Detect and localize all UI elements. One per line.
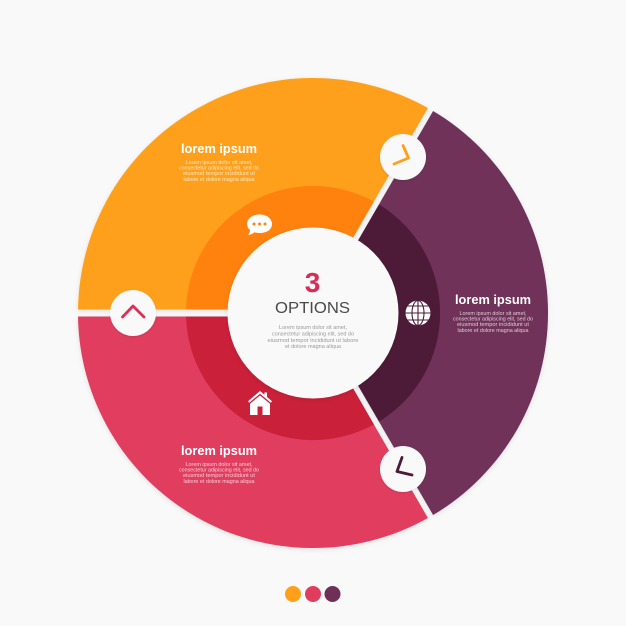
purple heading: lorem ipsum — [455, 292, 531, 307]
red body text: Lorem ipsum dolor sit amet, — [186, 462, 253, 468]
orange body text: consectetur adipiscing elit, sed do — [179, 166, 259, 172]
center body text — [268, 325, 358, 350]
red body text: eiusmod tempor incididunt ut — [183, 473, 256, 479]
panel: red segment — [78, 314, 428, 548]
red inner band — [186, 314, 374, 440]
icon: chat bubble — [247, 214, 272, 235]
purple body text: consectetur adipiscing elit, sed do — [453, 317, 533, 323]
red heading: lorem ipsum — [181, 443, 257, 458]
center circle — [228, 228, 398, 398]
center body text: Lorem ipsum dolor sit amet, — [279, 325, 347, 331]
purple outer band — [316, 111, 548, 515]
button: left chevron — [110, 290, 156, 336]
button: bottom-right chevron — [380, 446, 426, 492]
button: top-right chevron — [380, 134, 426, 180]
red body text — [179, 462, 259, 485]
orange outer band — [78, 78, 428, 312]
red body text: labore et dolore magna aliqua — [184, 479, 254, 485]
orange heading: lorem ipsum — [181, 141, 257, 156]
center body text: et dolore magna aliqua — [285, 344, 342, 350]
orange body text: eiusmod tempor incididunt ut — [183, 171, 256, 177]
red body text: consectetur adipiscing elit, sed do — [179, 468, 259, 474]
center heading: OPTIONS — [275, 300, 350, 317]
orange inner band — [186, 186, 374, 312]
icon: house — [248, 391, 272, 415]
orange body text: labore et dolore magna aliqua — [184, 177, 254, 183]
purple inner band — [316, 204, 440, 422]
panel: orange segment — [78, 78, 428, 312]
legend dots — [285, 586, 340, 602]
orange body text: Lorem ipsum dolor sit amet, — [186, 160, 253, 166]
purple body text: labore et dolore magna aliqua — [458, 328, 528, 334]
purple body text: Lorem ipsum dolor sit amet, — [460, 311, 527, 317]
red outer band — [78, 314, 428, 548]
panel: purple segment — [316, 111, 548, 515]
purple body text: eiusmod tempor incididunt ut — [457, 322, 530, 328]
purple body text — [453, 311, 533, 334]
orange body text — [179, 160, 259, 183]
center number: 3 — [305, 267, 320, 298]
center body text: consectetur adipiscing elit, sed do — [272, 332, 354, 338]
icon: globe — [406, 300, 430, 326]
center body text: eiusmod tempor incididunt ut labore — [268, 338, 358, 344]
